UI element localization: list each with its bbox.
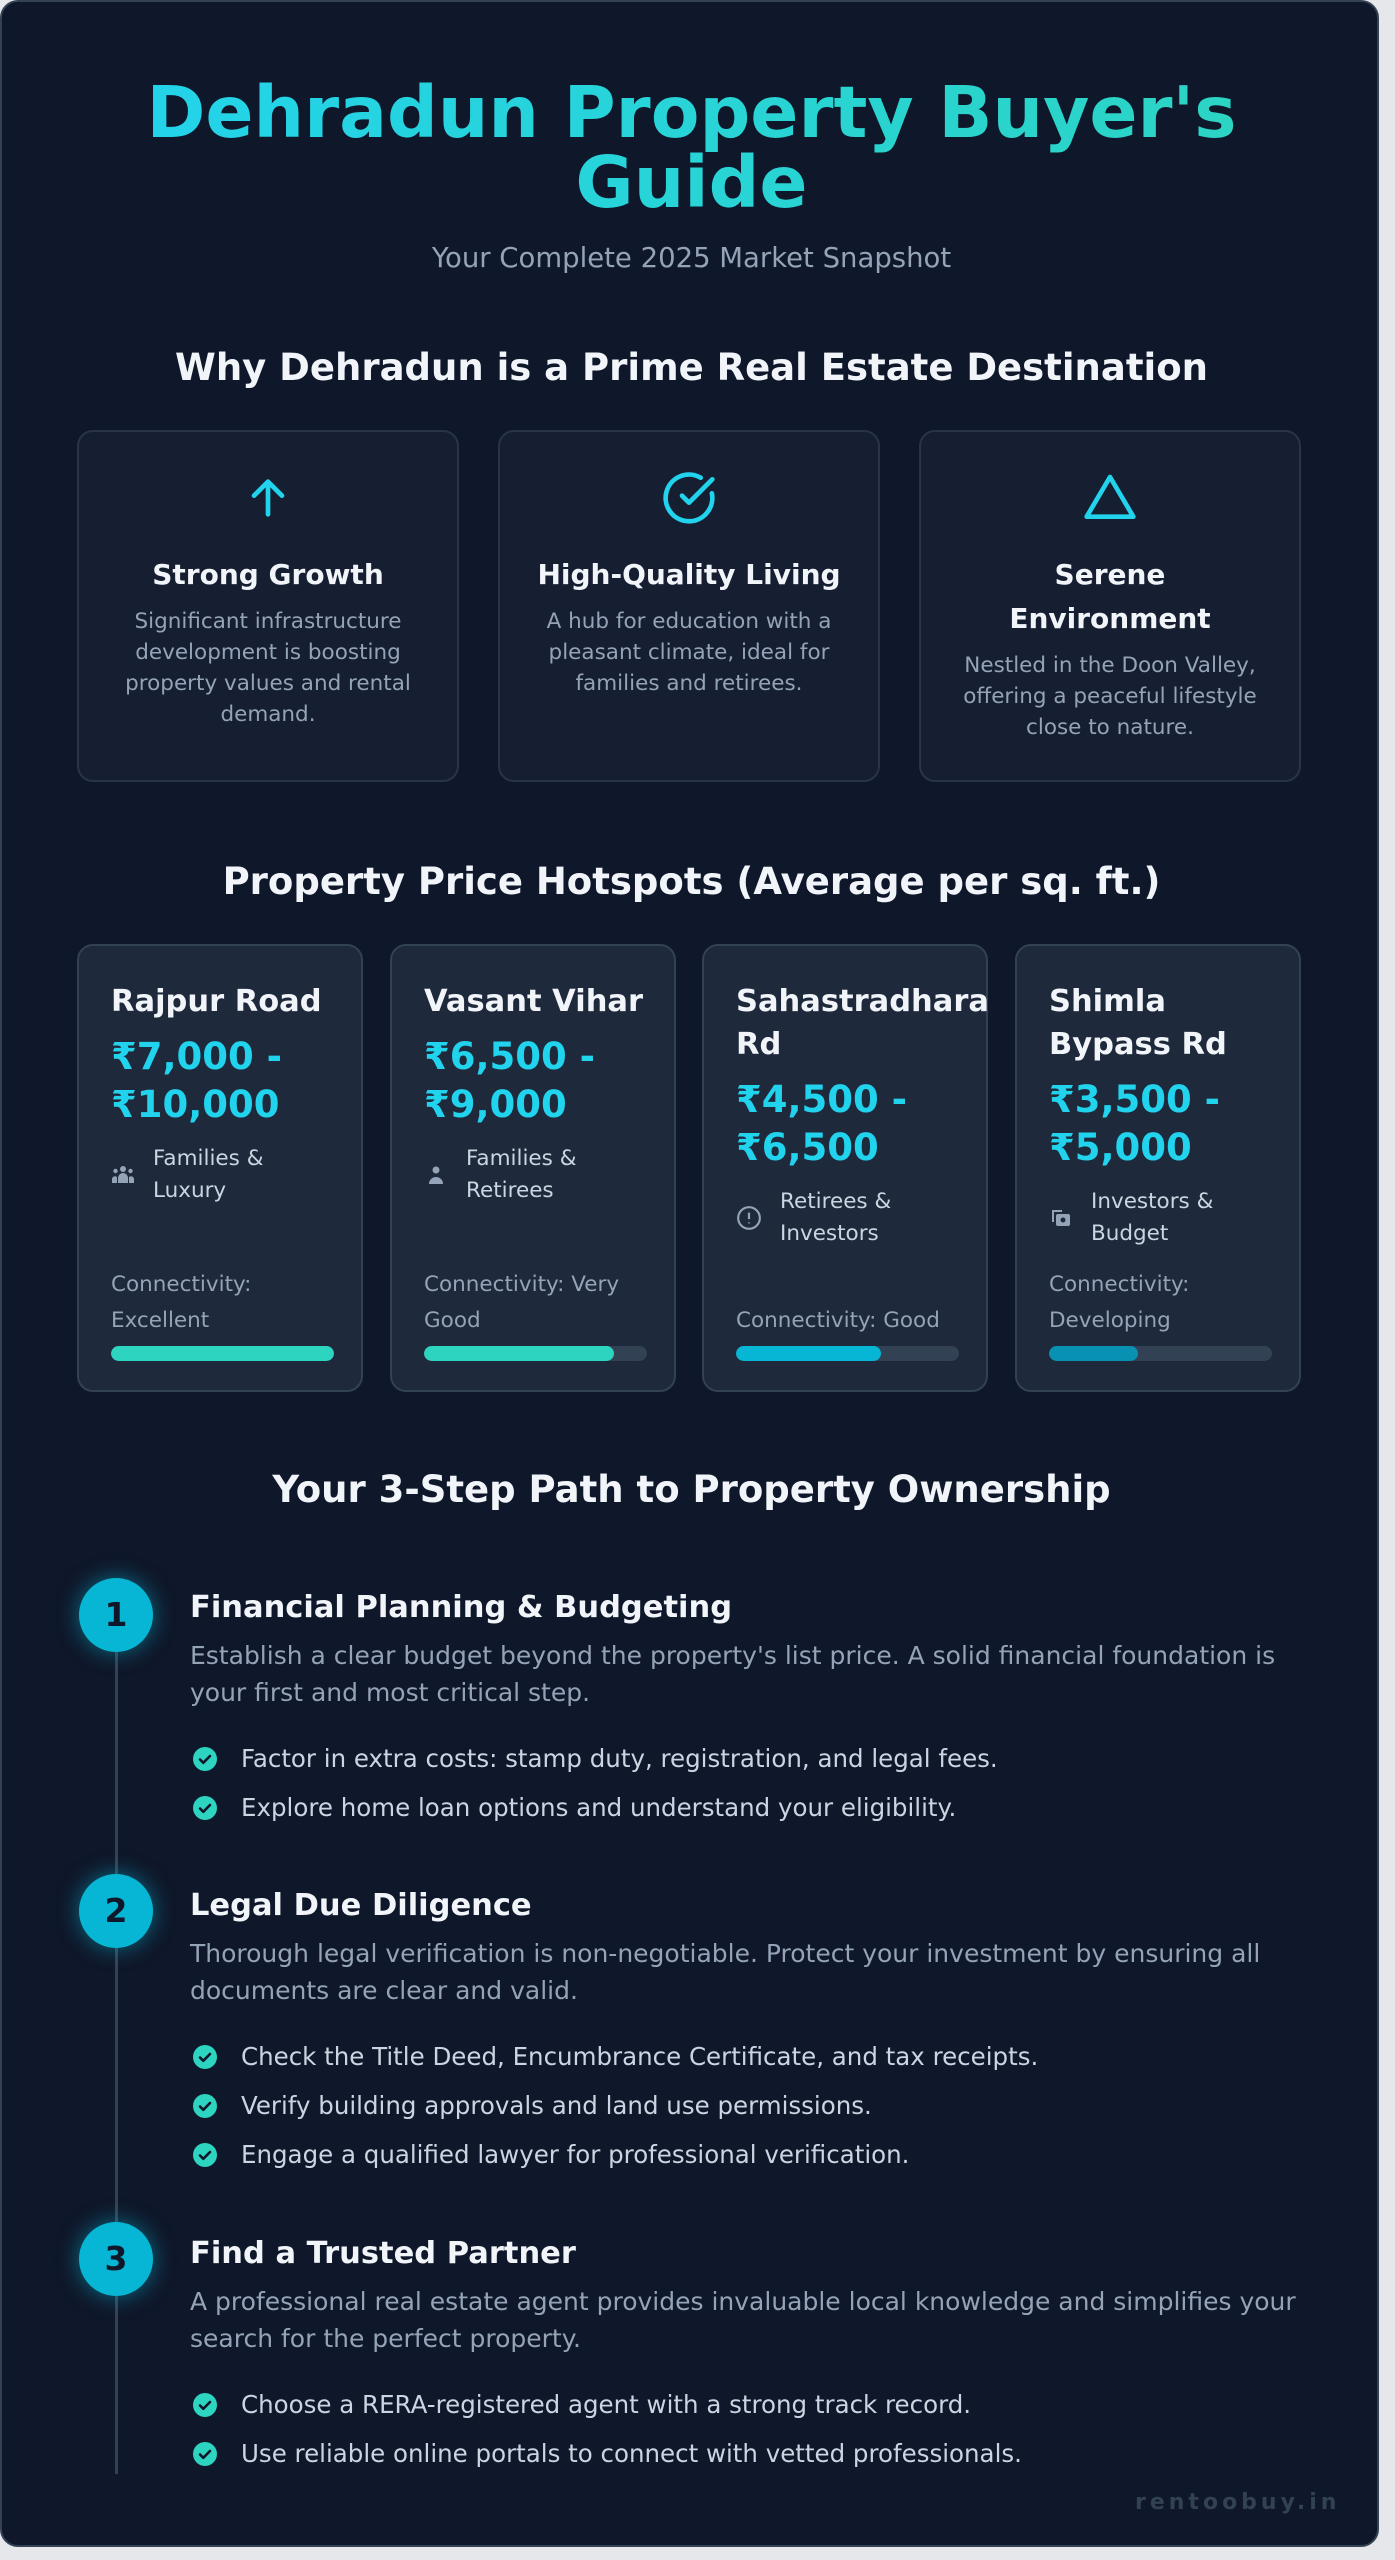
step 1: financial planning: Financial Planning & Budgeting xyxy=(190,1590,732,1625)
connectivity: very good: Good xyxy=(424,1308,481,1333)
text: high-quality living xyxy=(537,558,841,696)
connectivity: very good xyxy=(424,1272,647,1361)
connectivity: good xyxy=(736,1308,959,1361)
audience: investors & budget xyxy=(1052,1189,1213,1246)
connectivity: excellent: Excellent xyxy=(111,1308,209,1333)
step 2: legal due diligence: Engage a qualified lawyer for professional verification. xyxy=(241,2140,909,2169)
step 1 marker xyxy=(79,1578,153,1652)
price card: shimla bypass rd: Shimla xyxy=(1049,984,1166,1019)
price card: vasant vihar: ₹6,500 - xyxy=(424,1035,595,1078)
price card: shimla bypass rd: ₹5,000 xyxy=(1049,1126,1192,1169)
step 3 marker: 3 xyxy=(105,2239,127,2278)
text: high-quality living: High-Quality Living xyxy=(537,558,841,591)
step 1: financial planning: Explore home loan options and understand your eligibility. xyxy=(241,1793,956,1822)
icon: arrow up xyxy=(252,479,284,517)
price card: shimla bypass rd: ₹3,500 - xyxy=(1049,1078,1220,1121)
step 3: trusted partner xyxy=(190,2236,1296,2468)
price card: rajpur road xyxy=(77,944,363,1392)
price card: vasant vihar xyxy=(390,944,676,1392)
audience: retirees & investors: Investors xyxy=(780,1221,879,1246)
text: high-quality living: A hub for education with a pleasant climate, ideal for families and retirees. xyxy=(547,609,831,696)
price card: rajpur road: Rajpur Road xyxy=(111,984,322,1019)
card: serene environment xyxy=(919,430,1301,782)
connectivity: developing xyxy=(1049,1272,1272,1361)
price card: vasant vihar: Vasant Vihar xyxy=(424,984,643,1019)
text: strong growth: Significant infrastructure development is boosting property values and rental demand. xyxy=(125,609,411,727)
heading: 3-step path: Your 3-Step Path to Property Ownership xyxy=(272,1468,1111,1511)
audience: retirees & investors xyxy=(737,1189,891,1246)
connectivity: excellent xyxy=(111,1272,334,1361)
audience: investors & budget: Budget xyxy=(1091,1221,1168,1246)
price card: sahastradhara rd xyxy=(702,944,988,1392)
step 3: trusted partner: Find a Trusted Partner xyxy=(190,2236,576,2271)
heading: why dehradun: Why Dehradun is a Prime Real Estate Destination xyxy=(175,346,1208,389)
audience: families & retirees xyxy=(429,1146,576,1203)
price card: shimla bypass rd: Bypass Rd xyxy=(1049,1027,1227,1062)
step 1 marker: 1 xyxy=(105,1595,127,1634)
step 2: legal due diligence: Thorough legal verification is non-negotiable. Protect your investment by ensuring all documents are clear and valid. xyxy=(190,1939,1260,2005)
price card: sahastradhara rd: ₹6,500 xyxy=(736,1126,879,1169)
audience: families & retirees: Families & xyxy=(466,1146,576,1171)
price card: rajpur road: ₹10,000 xyxy=(111,1083,280,1126)
audience: families & luxury xyxy=(112,1146,263,1203)
step 2: legal due diligence: Verify building approvals and land use permissions. xyxy=(241,2091,872,2120)
audience: families & luxury: Luxury xyxy=(153,1178,226,1203)
step 1: financial planning xyxy=(190,1590,1275,1822)
connectivity: excellent: Connectivity: xyxy=(111,1272,251,1297)
step 3: trusted partner: Use reliable online portals to connect with vetted professionals. xyxy=(241,2439,1022,2468)
title: Guide xyxy=(575,141,808,224)
icon: check circle xyxy=(663,472,715,524)
price card: vasant vihar: ₹9,000 xyxy=(424,1083,567,1126)
text: strong growth: Strong Growth xyxy=(152,558,384,591)
timeline line xyxy=(115,1642,118,2474)
card: strong growth xyxy=(77,430,459,782)
step 2: legal due diligence xyxy=(190,1888,1260,2169)
connectivity: developing: Connectivity: xyxy=(1049,1272,1189,1297)
connectivity: very good: Connectivity: Very xyxy=(424,1272,619,1297)
audience: investors & budget: Investors & xyxy=(1091,1189,1213,1214)
text: serene environment: Environment xyxy=(1009,602,1211,635)
audience: families & retirees: Retirees xyxy=(466,1178,554,1203)
step 2: legal due diligence: Legal Due Diligence xyxy=(190,1888,532,1923)
text: strong growth xyxy=(125,558,411,727)
text: serene environment: Serene xyxy=(1055,558,1165,591)
title xyxy=(2,78,1381,218)
step 2 marker: 2 xyxy=(105,1891,127,1930)
price card: sahastradhara rd: ₹4,500 - xyxy=(736,1078,907,1121)
step 1: financial planning: Establish a clear budget beyond the property's list price. A solid financial foundation is your first and most critical step. xyxy=(190,1641,1275,1707)
card: high-quality living xyxy=(498,430,880,782)
price card: sahastradhara rd: Sahastradhara xyxy=(736,984,989,1019)
price card: sahastradhara rd: Rd xyxy=(736,1027,781,1062)
step 1: financial planning: Factor in extra costs: stamp duty, registration, and legal fees. xyxy=(241,1744,998,1773)
step 3: trusted partner: A professional real estate agent provides invaluable local knowledge and simplifies your search for the perfect property. xyxy=(190,2287,1296,2353)
heading: price hotspots: Property Price Hotspots (Average per sq. ft.) xyxy=(223,860,1160,903)
audience: families & luxury: Families & xyxy=(153,1146,263,1171)
connectivity: developing: Developing xyxy=(1049,1308,1171,1333)
step 2: legal due diligence: Check the Title Deed, Encumbrance Certificate, and tax receipts. xyxy=(241,2042,1038,2071)
icon: triangle xyxy=(1084,474,1136,519)
step 3 marker xyxy=(79,2222,153,2296)
step 2 marker xyxy=(79,1874,153,1948)
text: serene environment: Nestled in the Doon Valley, offering a peaceful lifestyle close to nature. xyxy=(963,653,1257,740)
price card: shimla bypass rd xyxy=(1015,944,1301,1392)
price card: rajpur road: ₹7,000 - xyxy=(111,1035,282,1078)
footer brand: rentoobuy.in xyxy=(1135,2490,1340,2515)
step 3: trusted partner: Choose a RERA-registered agent with a strong track record. xyxy=(241,2390,971,2419)
subtitle: Your Complete 2025 Market Snapshot xyxy=(432,242,951,274)
audience: retirees & investors: Retirees & xyxy=(780,1189,891,1214)
title: Dehradun Property Buyer's xyxy=(146,71,1237,154)
text: serene environment xyxy=(963,558,1257,740)
connectivity: good: Connectivity: Good xyxy=(736,1308,940,1333)
